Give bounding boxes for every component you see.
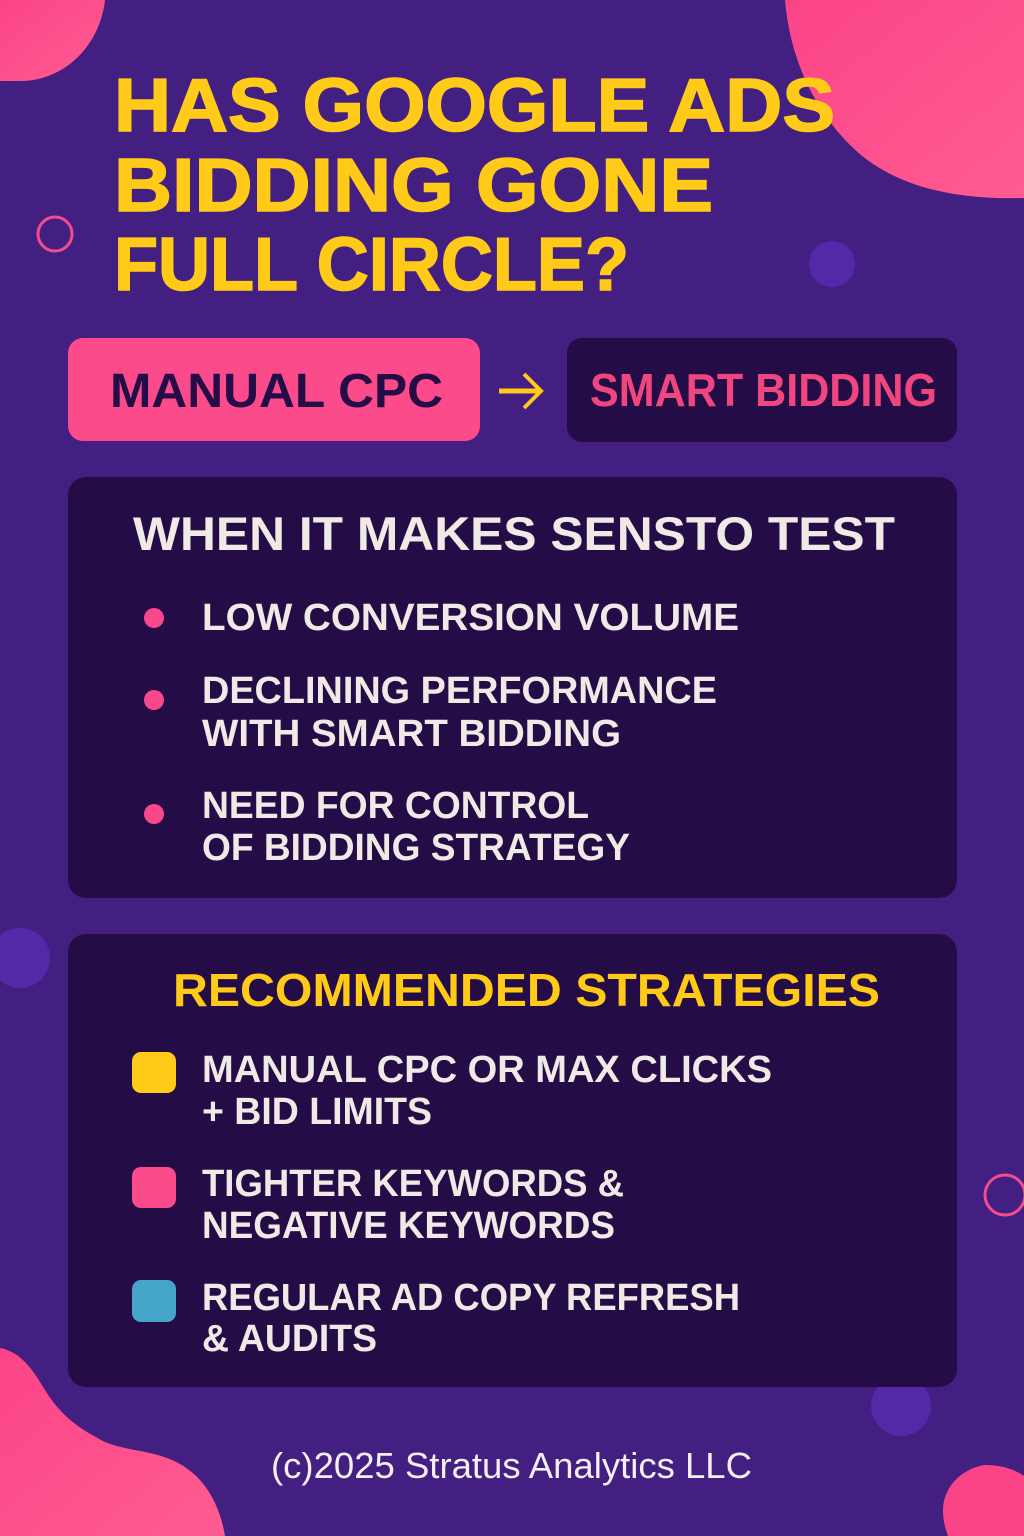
item: regular ad copy refresh: REGULAR AD COPY REFRESH bbox=[202, 1277, 740, 1319]
dot: lower right bbox=[871, 1376, 931, 1436]
item: declining performance: WITH SMART BIDDING bbox=[202, 713, 621, 755]
item: tighter keywords bbox=[132, 1163, 624, 1247]
ring: upper left bbox=[38, 217, 72, 251]
title: FULL CIRCLE? bbox=[114, 222, 629, 306]
footer: (c)2025 Stratus Analytics LLC bbox=[271, 1445, 752, 1486]
item: declining performance bbox=[144, 670, 717, 755]
box: manual cpc: MANUAL CPC bbox=[110, 365, 443, 418]
arrow bbox=[499, 374, 541, 408]
heading: when to test: WHEN IT MAKES SENSTO TEST bbox=[133, 507, 895, 560]
item: tighter keywords: NEGATIVE KEYWORDS bbox=[202, 1205, 615, 1247]
heading: recommended strategies: RECOMMENDED STRATEGIES bbox=[173, 964, 880, 1016]
title bbox=[114, 63, 835, 306]
blob: top left bbox=[0, 0, 105, 81]
box: smart bidding bbox=[567, 338, 957, 442]
blob: top right bbox=[785, 0, 1024, 198]
panel: when it makes sense to test bbox=[68, 477, 957, 898]
title: HAS GOOGLE ADS bbox=[114, 63, 835, 147]
ring: right edge bbox=[985, 1175, 1024, 1215]
item: tighter keywords: TIGHTER KEYWORDS & bbox=[202, 1163, 624, 1205]
blob: bottom left bbox=[0, 1348, 225, 1536]
title: BIDDING GONE bbox=[114, 143, 713, 227]
item: need for control: OF BIDDING STRATEGY bbox=[202, 827, 630, 869]
item: regular ad copy refresh: & AUDITS bbox=[202, 1318, 377, 1360]
item: manual cpc or max clicks: + BID LIMITS bbox=[202, 1091, 432, 1133]
box: manual cpc bbox=[68, 338, 480, 441]
item: manual cpc or max clicks: MANUAL CPC OR MAX CLICKS bbox=[202, 1049, 772, 1091]
item: low conversion volume: LOW CONVERSION VOLUME bbox=[202, 597, 739, 639]
panel: recommended strategies bbox=[68, 934, 957, 1387]
blob: bottom right bbox=[943, 1465, 1024, 1536]
item: declining performance: DECLINING PERFORMANCE bbox=[202, 670, 717, 712]
box: smart bidding: SMART BIDDING bbox=[590, 364, 937, 416]
dot: upper right bbox=[809, 241, 855, 287]
item: manual cpc or max clicks bbox=[132, 1049, 772, 1133]
dot: left edge bbox=[0, 928, 50, 988]
item: need for control bbox=[144, 785, 630, 869]
item: regular ad copy refresh bbox=[132, 1277, 740, 1360]
item: need for control: NEED FOR CONTROL bbox=[202, 785, 589, 827]
